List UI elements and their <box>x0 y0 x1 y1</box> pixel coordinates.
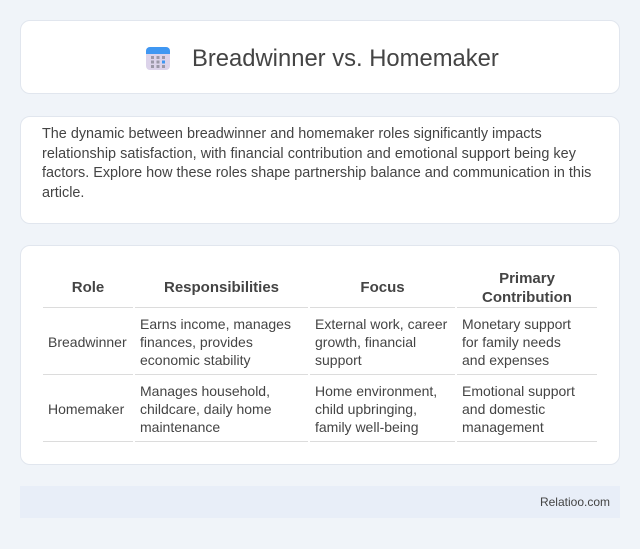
intro text: factors. Explore how these roles shape partnership balance and communication in this <box>42 165 591 181</box>
table header: Focus <box>360 279 405 296</box>
table row: Breadwinner: economic stability <box>140 352 250 368</box>
intro text: relationship satisfaction, with financial contribution and emotional support being key <box>42 146 576 162</box>
table row: Homemaker: Manages household, <box>140 383 270 399</box>
table row: Breadwinner: finances, provides <box>140 334 253 350</box>
table row: Breadwinner: Earns income, manages <box>140 316 291 332</box>
table row: Breadwinner: support <box>315 352 362 368</box>
table row: Homemaker: childcare, daily home <box>140 401 272 417</box>
icon: calendar <box>146 47 170 70</box>
table row: Homemaker <box>48 383 575 435</box>
intro text: article. <box>42 184 84 200</box>
panel: header <box>20 20 620 94</box>
table row: Homemaker: maintenance <box>140 419 220 435</box>
title: Breadwinner vs. Homemaker <box>192 45 499 72</box>
table header: Primary <box>499 270 555 287</box>
table header: Responsibilities <box>164 279 279 296</box>
table row: Homemaker: management <box>462 419 544 435</box>
panel: comparison table <box>20 245 620 465</box>
table row: Breadwinner <box>48 316 571 368</box>
panel: intro <box>20 116 620 224</box>
table header: Role <box>72 279 104 296</box>
table row: Breadwinner: External work, career <box>315 316 447 332</box>
footer <box>20 486 620 518</box>
table row: Homemaker: family well-being <box>315 419 418 435</box>
table row: Homemaker: child upbringing, <box>315 401 417 417</box>
table row: Breadwinner: Monetary support <box>462 316 571 332</box>
table row: Breadwinner: and expenses <box>462 352 549 368</box>
table row: Homemaker: Home environment, <box>315 383 437 399</box>
table row: Breadwinner: for family needs <box>462 334 561 350</box>
table row: Breadwinner: growth, financial <box>315 334 416 350</box>
table row: Homemaker: and domestic <box>462 401 545 417</box>
table header: Contribution <box>482 289 572 306</box>
intro text: The dynamic between breadwinner and homemaker roles significantly impacts <box>42 126 542 142</box>
table row: Homemaker: Emotional support <box>462 383 575 399</box>
table header <box>72 270 572 306</box>
intro text <box>42 126 591 200</box>
table row: Homemaker: Homemaker <box>48 401 124 417</box>
footer brand: Relatioo.com <box>540 495 610 509</box>
table row: Breadwinner: Breadwinner <box>48 334 127 350</box>
